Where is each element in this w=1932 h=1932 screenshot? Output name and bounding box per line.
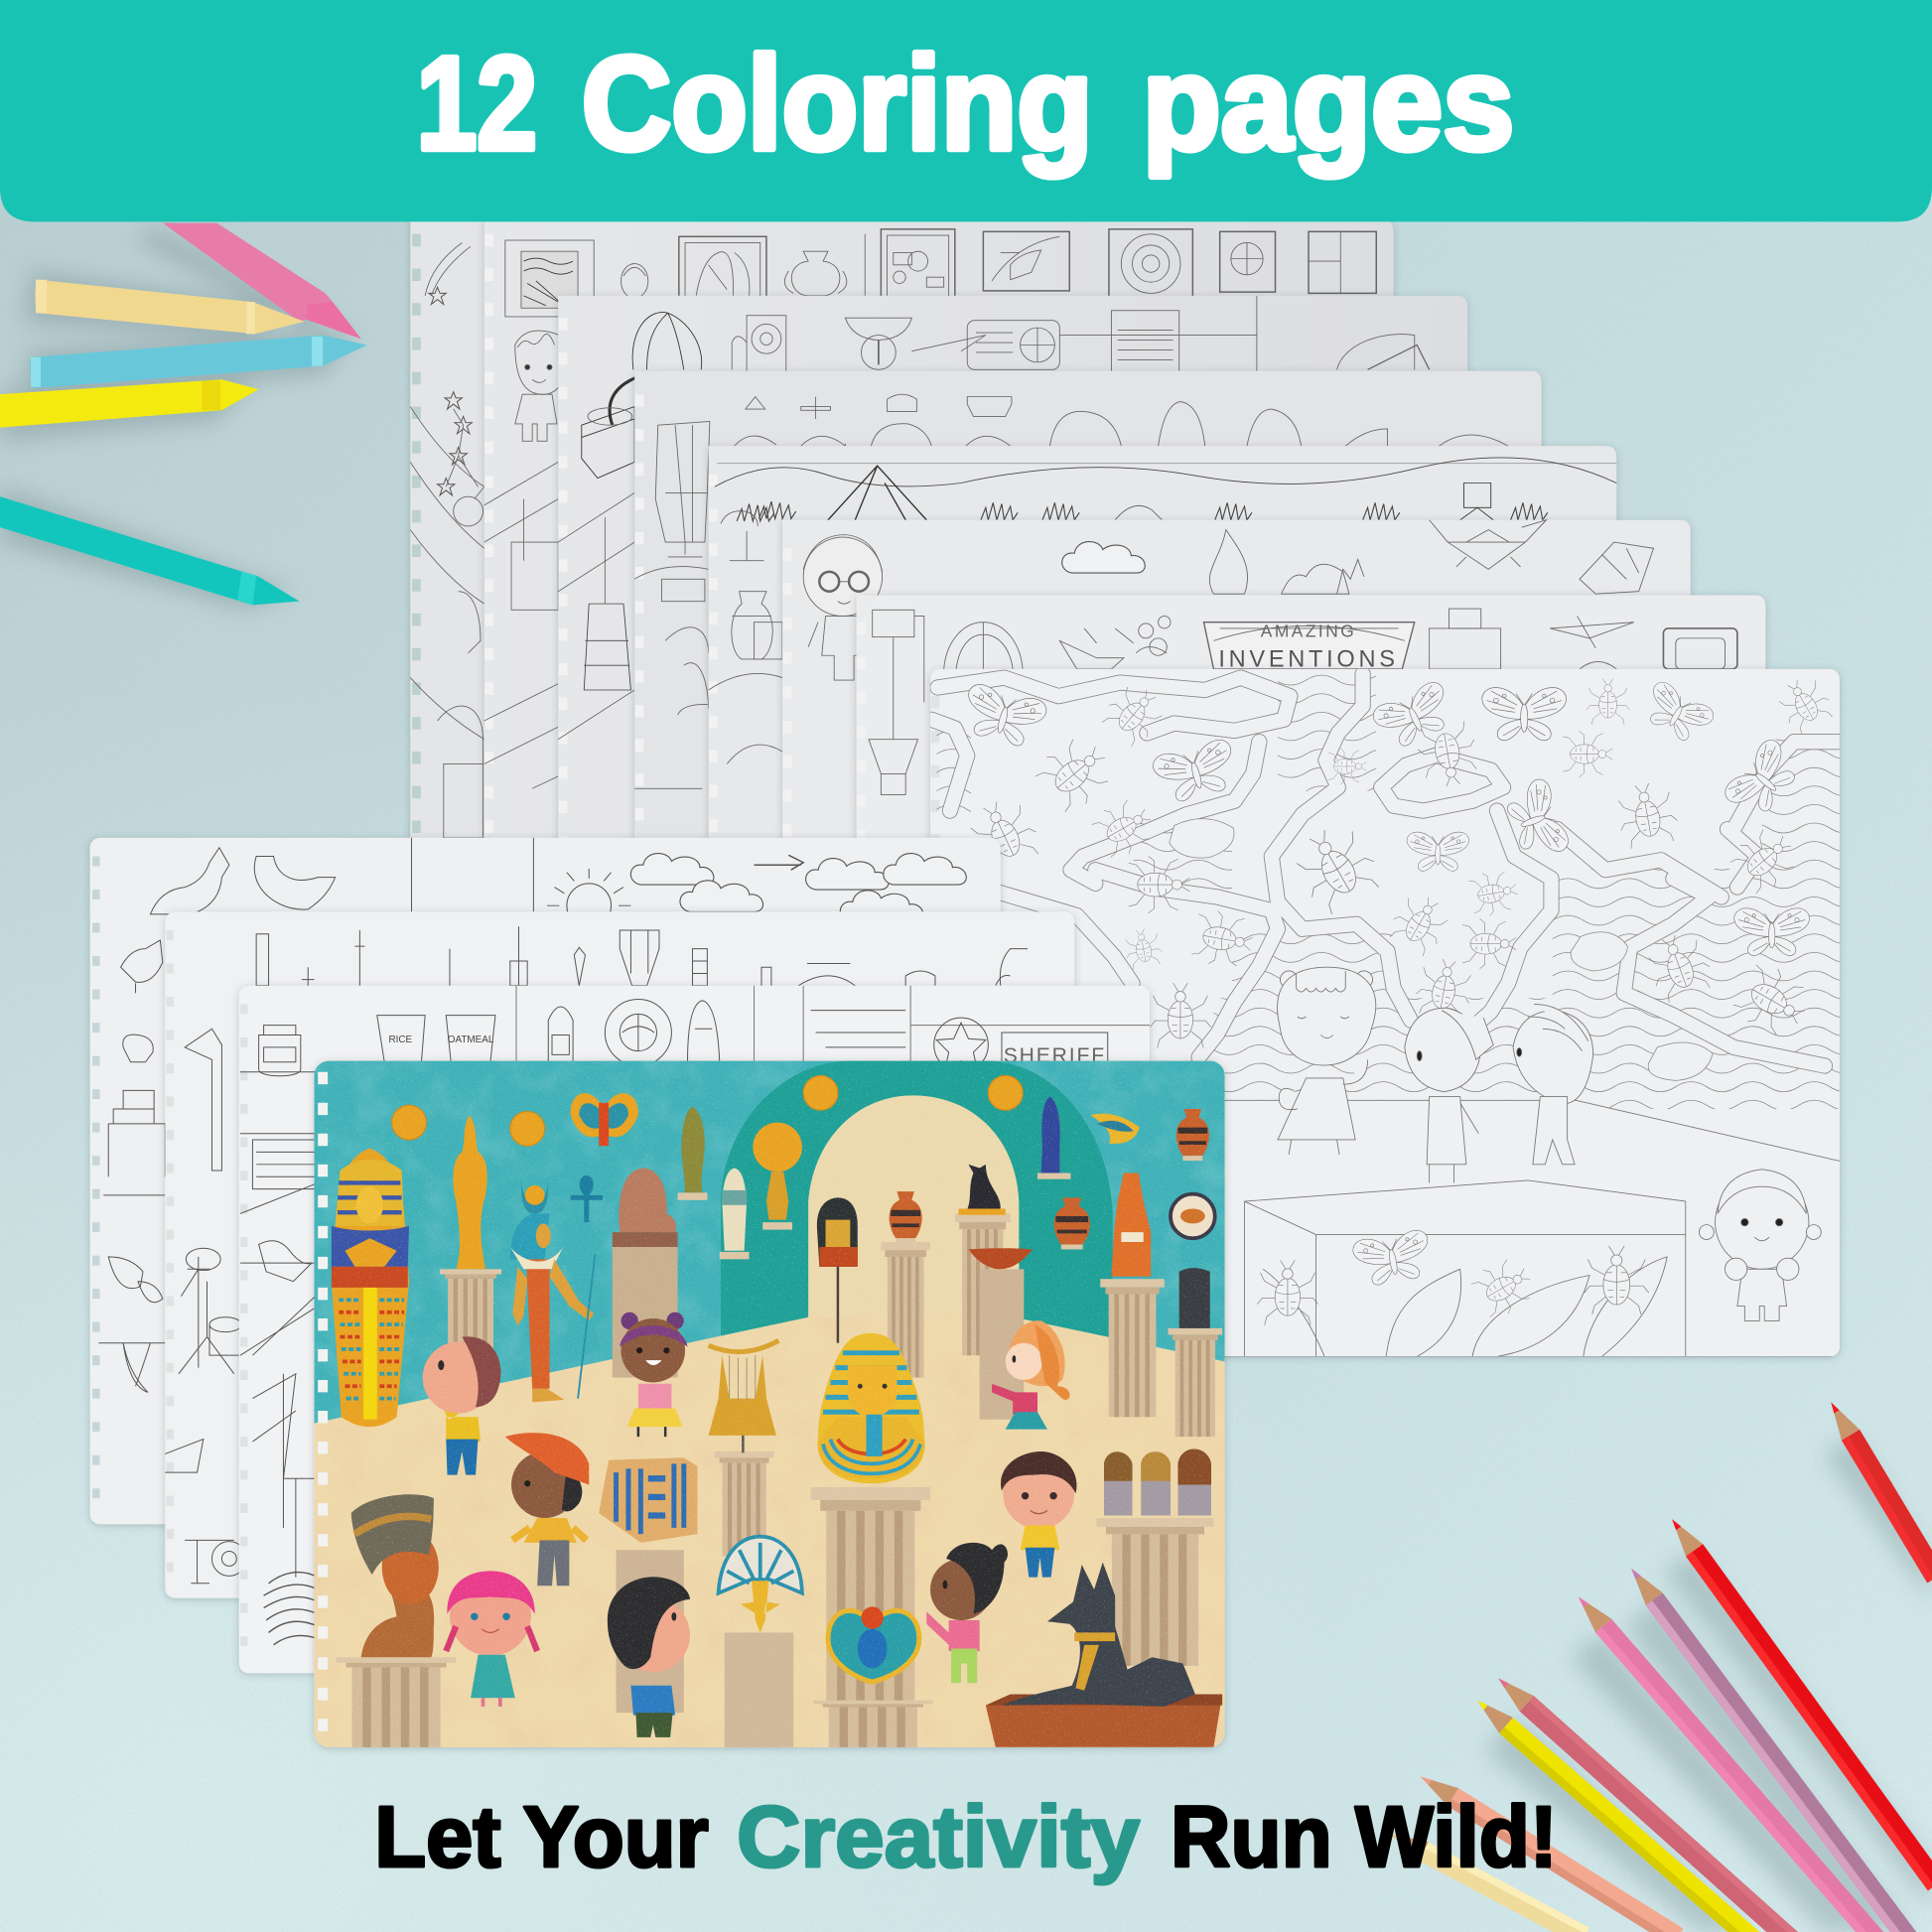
tagline: creativity: Creativity	[737, 1789, 1140, 1885]
sheriff sign: SHERIFF	[1004, 1044, 1106, 1067]
insect display case	[1244, 1180, 1686, 1356]
mauve pencil	[1623, 1563, 1921, 1932]
red pencil	[1664, 1513, 1932, 1890]
title: pages: pages	[1142, 30, 1514, 178]
ankh	[571, 1175, 603, 1222]
ground	[1223, 1100, 1844, 1356]
page: desert landscape	[709, 446, 1616, 1134]
tagline: run wild: Run Wild!	[1171, 1789, 1558, 1885]
page: old west store	[239, 986, 1150, 1673]
harp on column	[709, 1340, 778, 1556]
page: insect maze	[930, 669, 1861, 1356]
tagline: let your: Let Your	[374, 1789, 709, 1885]
mummy statue	[720, 1169, 750, 1259]
peach pencil	[1415, 1768, 1683, 1932]
speech bubbles	[1170, 819, 1713, 1080]
kid: purple hair	[620, 1312, 688, 1437]
pink crayon	[163, 223, 361, 339]
dark arch	[721, 1061, 1113, 1355]
tablet on pedestal	[599, 1457, 697, 1713]
sign text: INVENTIONS	[1218, 645, 1399, 671]
floor mottling	[314, 1317, 1225, 1747]
light arch	[808, 1095, 1019, 1330]
pink pencil	[1571, 1590, 1886, 1932]
page: art gallery	[484, 219, 1394, 909]
nefertiti bust on column	[337, 1494, 456, 1749]
far red pencil	[1822, 1397, 1932, 1583]
page: old inventions	[558, 296, 1467, 983]
plate	[1171, 1194, 1215, 1238]
tagline	[374, 1789, 1558, 1885]
stack of coloring pages, bottom	[90, 838, 1225, 1762]
page: ancient clothing	[634, 371, 1542, 1059]
pencil shadows	[1484, 1436, 1932, 1932]
title: Coloring: Coloring	[582, 30, 1093, 178]
kid: black hair	[608, 1577, 690, 1737]
wall mottling	[314, 1061, 1225, 1431]
kid: orange cap	[505, 1433, 589, 1586]
print speckle	[314, 1061, 1225, 1747]
tutankhamun mask on column	[811, 1333, 930, 1703]
kid with braids	[1699, 1170, 1821, 1320]
museum floor	[314, 1317, 1225, 1747]
fan on pedestal	[719, 1537, 802, 1749]
kid with wavy hair	[1513, 1004, 1593, 1165]
crayon shadows	[0, 228, 357, 610]
rose pencil	[1491, 1670, 1798, 1932]
title	[416, 30, 1514, 178]
outlined kids	[1278, 967, 1821, 1320]
page: farm and weather	[90, 838, 1001, 1524]
kid: boy with backpack	[1001, 1451, 1077, 1578]
mask on stick	[817, 1197, 858, 1343]
seated figure on column	[1100, 1173, 1165, 1417]
colored pencils bottom right	[1385, 1397, 1932, 1932]
butter pencil	[1385, 1824, 1589, 1932]
black statue on column	[1169, 1268, 1222, 1437]
yellow crayon	[0, 379, 259, 428]
kid: brown hair	[423, 1336, 500, 1475]
spiral holes	[319, 1072, 327, 1747]
butter crayon	[35, 280, 305, 334]
page: museum, colored	[314, 1061, 1225, 1762]
scarab pendant on column	[813, 1606, 932, 1762]
yellow pencil	[1470, 1693, 1764, 1932]
kid: pink hair	[446, 1571, 537, 1707]
winged scarab amulet	[571, 1093, 638, 1146]
sack label: OATMEAL	[448, 1035, 494, 1045]
maze paths	[931, 674, 1844, 1066]
sack label: RICE	[389, 1035, 413, 1045]
kid: red hair	[992, 1320, 1070, 1430]
anubis on chest	[986, 1563, 1222, 1747]
sphinx on pedestal	[613, 1169, 678, 1378]
vase on column	[881, 1191, 930, 1378]
sign text: AMAZING	[1261, 621, 1356, 641]
column and osiris statue	[440, 1115, 501, 1355]
maze artwork clipped to page	[931, 671, 1861, 1356]
museum wall	[314, 1061, 1225, 1431]
page: space	[410, 209, 1319, 897]
page: musical instruments	[165, 911, 1074, 1598]
kid with ponytail	[1405, 1008, 1493, 1182]
kid: girl with curls	[926, 1543, 1008, 1683]
page: prehistoric	[782, 520, 1691, 1210]
coins	[392, 1075, 1023, 1146]
blue statue, eye and vases	[1037, 1097, 1209, 1249]
teal crayon	[0, 496, 300, 605]
kid with buns	[1278, 967, 1376, 1155]
title: 12: 12	[416, 30, 537, 178]
wavy ground lines	[936, 675, 1861, 1110]
sarcophagus	[332, 1149, 409, 1427]
cat on column with bowl	[955, 1165, 1033, 1420]
isis statue	[510, 1180, 595, 1402]
gold disc statue	[753, 1123, 802, 1230]
insects	[959, 671, 1838, 1048]
top banner	[0, 0, 1932, 221]
blue crayon	[30, 336, 367, 388]
stack of coloring pages, top	[410, 209, 1861, 1356]
crayons top left	[0, 223, 367, 610]
canopic jars on column	[1097, 1449, 1213, 1666]
page: amazing inventions	[857, 595, 1765, 1283]
small green statue	[678, 1106, 707, 1200]
